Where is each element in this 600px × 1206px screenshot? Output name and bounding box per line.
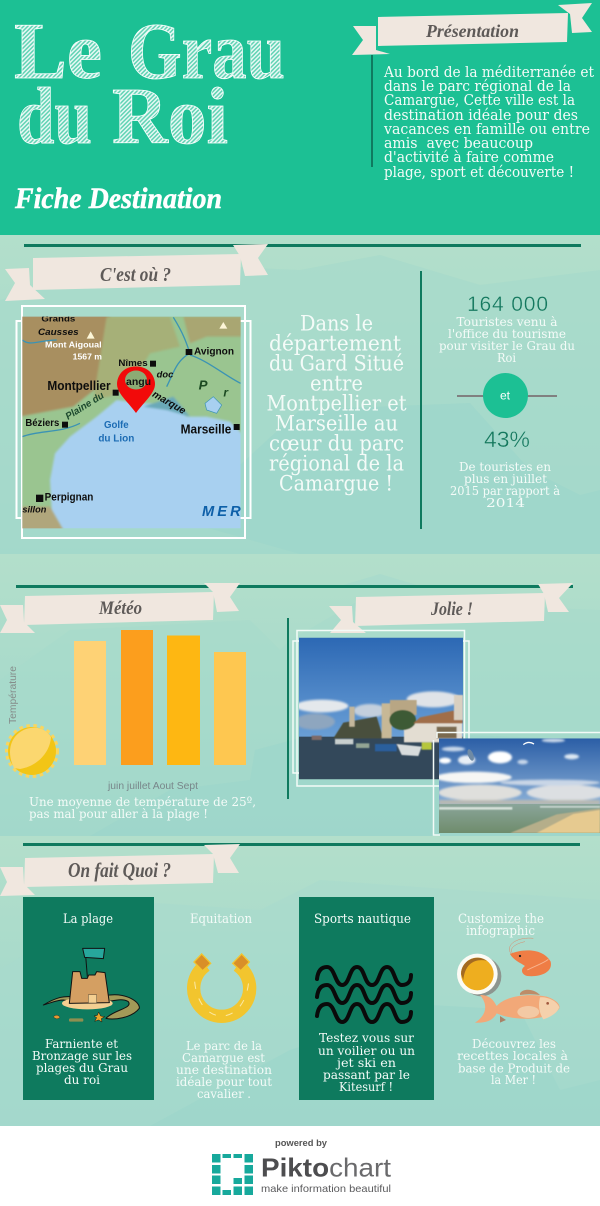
map: Plaine du bbox=[64, 390, 106, 423]
location text: Marseille au bbox=[275, 412, 398, 436]
connector: et: et bbox=[500, 388, 511, 402]
stat description: l'office du tourisme bbox=[448, 327, 566, 341]
text: equitation: cavalier . bbox=[197, 1086, 251, 1101]
divider bbox=[420, 271, 422, 529]
presentation divider bbox=[371, 55, 373, 167]
location text: département bbox=[269, 332, 402, 356]
icon: sun bbox=[7, 726, 57, 776]
map: P bbox=[199, 377, 208, 392]
section rule bbox=[24, 244, 581, 247]
panel: equitation bbox=[176, 912, 272, 1101]
location text: Montpellier et bbox=[266, 392, 407, 416]
location text: du Gard Situé bbox=[269, 352, 404, 376]
text: customize: la Mer ! bbox=[491, 1072, 536, 1087]
map bbox=[20, 315, 243, 530]
map: marque bbox=[150, 389, 188, 417]
divider bbox=[287, 618, 289, 799]
connector: et bbox=[457, 373, 557, 418]
text: sports nautique: un voilier ou un bbox=[318, 1043, 415, 1058]
text: la plage: Bronzage sur les bbox=[32, 1048, 132, 1063]
presentation text: d'activité à faire comme bbox=[384, 149, 554, 166]
axis label: température: Température bbox=[8, 666, 19, 724]
location text: cœur du parc bbox=[269, 432, 404, 456]
ribbon: météo: Météo bbox=[98, 598, 142, 619]
stat description: De touristes en bbox=[459, 460, 551, 474]
map: Golfe bbox=[104, 420, 129, 431]
stat description bbox=[439, 315, 575, 365]
weather text: pas mal pour aller à la plage ! bbox=[29, 806, 208, 821]
text: equitation: idéale pour tout bbox=[176, 1074, 272, 1089]
icon: map pin: angu bbox=[126, 376, 151, 388]
map: Perpignan bbox=[45, 492, 93, 504]
stat description: 2014 bbox=[486, 496, 525, 510]
logo wordmark: Piktochart bbox=[261, 1152, 392, 1182]
title: Grau bbox=[128, 8, 285, 96]
map: 1567 m bbox=[73, 351, 102, 361]
presentation text: vacances en famille ou entre bbox=[383, 122, 590, 138]
map: Nîmes bbox=[118, 358, 148, 368]
ribbon: on fait quoi: On fait Quoi ? bbox=[68, 858, 171, 882]
text: la plage: plages du Grau bbox=[36, 1060, 128, 1075]
location text: Camargue ! bbox=[279, 472, 393, 496]
stat description: 2015 par rapport à bbox=[450, 484, 560, 498]
presentation text: Au bord de la méditerranée et bbox=[383, 65, 594, 81]
ribbon: Présentation bbox=[352, 3, 592, 55]
stat description: Roi bbox=[497, 351, 516, 365]
panel: sports nautique bbox=[299, 897, 434, 1100]
presentation text: Camargue, Cette ville est la bbox=[384, 93, 575, 109]
heading: customize: infographic bbox=[466, 924, 535, 939]
weather text bbox=[29, 794, 256, 821]
text: customize: base de Produit de bbox=[458, 1060, 570, 1076]
icon: map pin bbox=[117, 366, 155, 413]
section rule bbox=[16, 585, 573, 588]
ribbon: Présentation: Présentation bbox=[425, 21, 519, 41]
map: MER bbox=[202, 504, 241, 520]
map: Avignon bbox=[194, 347, 234, 358]
text: la plage: du roi bbox=[64, 1072, 100, 1087]
heading: customize: Customize the bbox=[458, 912, 544, 927]
text: equitation: Camargue est bbox=[182, 1050, 265, 1065]
text: equitation: une destination bbox=[176, 1062, 272, 1077]
presentation text: plage, sport et découverte ! bbox=[384, 165, 574, 181]
map: Grands bbox=[41, 315, 76, 324]
map: sillon bbox=[22, 505, 47, 515]
text: customize: recettes locales à bbox=[457, 1048, 569, 1063]
text: equitation: Le parc de la bbox=[186, 1038, 262, 1053]
stat description: pour visiter le Grau du bbox=[439, 339, 575, 353]
stat description bbox=[450, 460, 560, 510]
text: la plage bbox=[32, 1036, 132, 1087]
stat: 43%: 43% bbox=[484, 427, 530, 452]
logo mark bbox=[212, 1154, 253, 1195]
presentation text: destination idéale pour des bbox=[384, 108, 578, 124]
ribbon: jolie bbox=[329, 583, 573, 633]
text: sports nautique bbox=[318, 1030, 415, 1094]
ribbon: c'est où: C'est où ? bbox=[100, 264, 171, 286]
location text: entre bbox=[310, 372, 363, 396]
ribbon: c'est où bbox=[5, 244, 268, 301]
title: Le bbox=[14, 8, 102, 96]
location text: régional de la bbox=[269, 452, 404, 476]
location text: Dans le bbox=[300, 312, 373, 336]
photo frame bbox=[293, 630, 469, 786]
stat description: Touristes venu à bbox=[456, 315, 558, 329]
map: r bbox=[223, 386, 229, 400]
text: customize: Découvrez les bbox=[472, 1036, 556, 1051]
map frame bbox=[16, 306, 250, 538]
presentation text: amis avec beaucoup bbox=[384, 136, 533, 152]
map: du Lion bbox=[98, 433, 134, 444]
photo: harbour bbox=[295, 638, 463, 779]
location text bbox=[266, 312, 407, 496]
text: sports nautique: jet ski en bbox=[335, 1055, 396, 1070]
title bbox=[14, 8, 285, 161]
panel: customize bbox=[457, 912, 570, 1087]
bar chart bbox=[74, 630, 246, 765]
photo frame bbox=[434, 732, 600, 835]
heading: customize bbox=[458, 912, 544, 939]
text: sports nautique: Testez vous sur bbox=[319, 1030, 414, 1045]
heading: la plage: La plage bbox=[63, 912, 113, 927]
icon: horseshoe bbox=[194, 954, 250, 1016]
title: du bbox=[17, 73, 92, 161]
text: customize bbox=[457, 1036, 570, 1087]
text: la plage: Farniente et bbox=[45, 1036, 118, 1051]
ribbon: jolie: Jolie ! bbox=[430, 599, 473, 620]
heading: equitation: Equitation bbox=[190, 912, 253, 927]
map: Béziers bbox=[25, 418, 60, 429]
panel: la plage bbox=[23, 897, 154, 1100]
ribbon: on fait quoi bbox=[0, 844, 240, 896]
tagline: make information beautiful bbox=[261, 1183, 391, 1195]
map: Causses bbox=[38, 327, 79, 337]
stat description: plus en juillet bbox=[464, 472, 547, 486]
map: Montpellier bbox=[47, 379, 111, 393]
title: Roi bbox=[112, 73, 228, 161]
map: doc bbox=[157, 369, 174, 379]
section rule bbox=[23, 843, 580, 846]
panel: météo et jolie bbox=[0, 554, 600, 836]
photo: beach bbox=[435, 738, 600, 833]
axis labels: months: juin juillet Aout Sept bbox=[107, 781, 198, 792]
icon: waves bbox=[317, 967, 411, 1022]
text: sports nautique: passant par le bbox=[323, 1067, 410, 1082]
panel: c'est où bbox=[0, 235, 600, 554]
ribbon: météo bbox=[0, 583, 240, 633]
heading: sports nautique: Sports nautique bbox=[314, 912, 411, 927]
icon: food bbox=[457, 938, 560, 1023]
presentation text bbox=[383, 65, 594, 181]
presentation text: dans le parc régional de la bbox=[384, 79, 571, 95]
footer bbox=[0, 1126, 600, 1206]
subtitle: Fiche Destination bbox=[14, 182, 222, 215]
map: Mont Aigoual bbox=[45, 339, 102, 349]
panel: on fait quoi bbox=[0, 836, 600, 1126]
text: equitation bbox=[176, 1038, 272, 1101]
header background bbox=[0, 0, 600, 235]
text: sports nautique: Kitesurf ! bbox=[339, 1079, 393, 1094]
icon: sand castle bbox=[43, 948, 139, 1022]
stat: 164 000: 164 000 bbox=[467, 293, 548, 316]
powered by: powered by bbox=[275, 1138, 328, 1149]
weather text: Une moyenne de température de 25º, bbox=[29, 794, 256, 809]
map: Marseille bbox=[181, 422, 231, 436]
